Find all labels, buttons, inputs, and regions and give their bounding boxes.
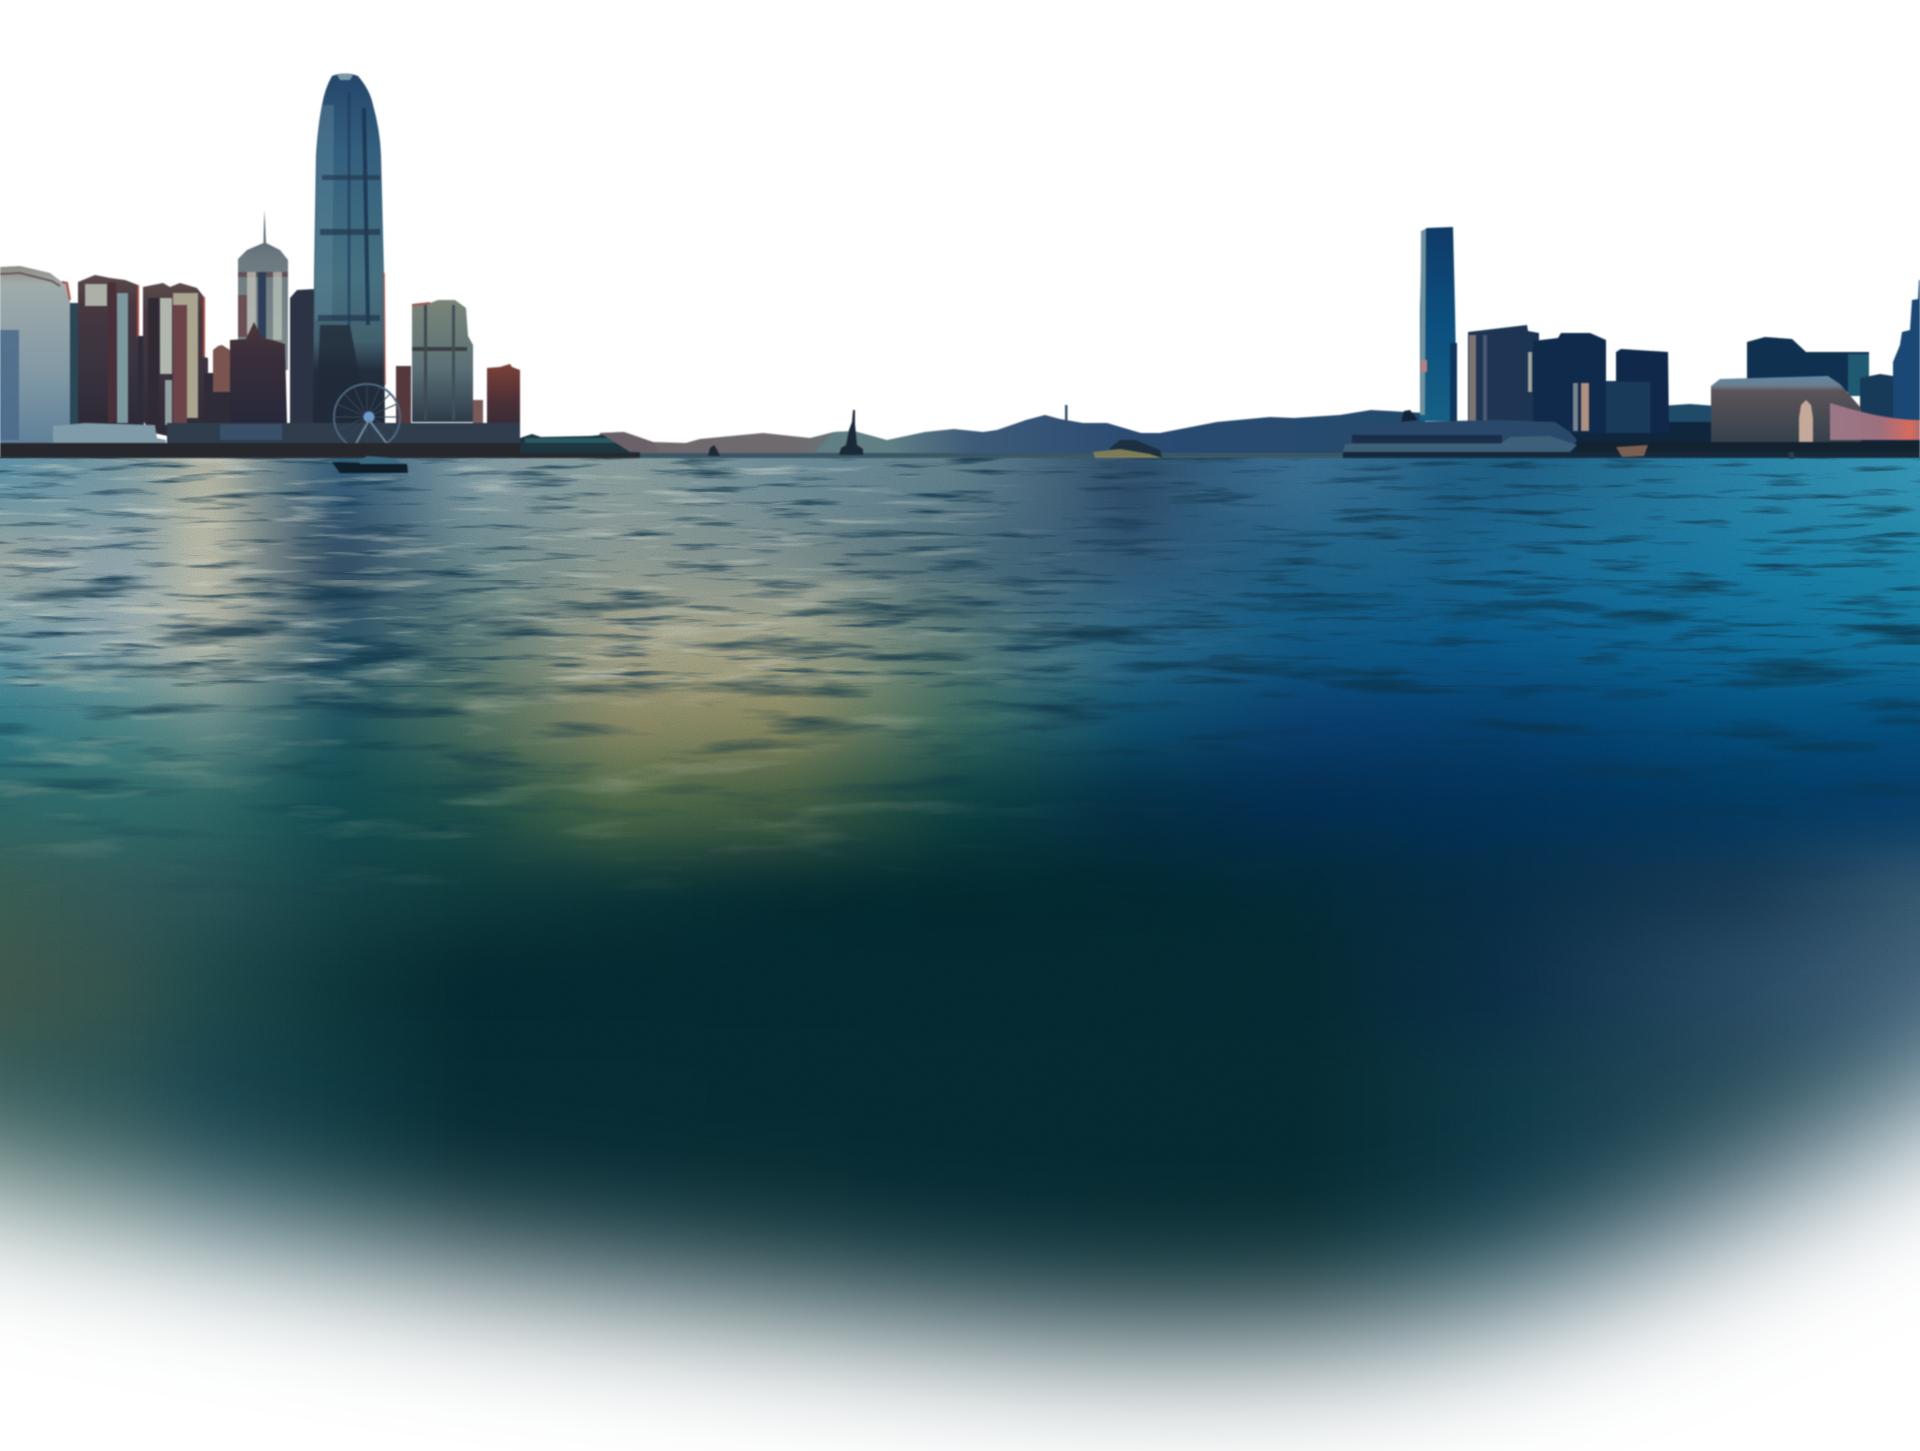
distant mountains	[590, 410, 1425, 458]
pier building	[520, 434, 640, 453]
dark hotel backdrop	[1747, 337, 1869, 392]
far right tower	[1893, 280, 1920, 425]
dark building under plaza	[230, 322, 287, 424]
chimney	[1065, 405, 1068, 427]
left tower: curved slab	[0, 266, 72, 443]
pier roof teal	[525, 438, 620, 443]
water colour field	[0, 380, 1920, 1451]
tan panel	[1573, 383, 1589, 431]
tug with mast	[839, 410, 863, 455]
ICC tower	[1420, 227, 1457, 421]
IFC tower	[313, 74, 385, 445]
marker buoy	[1789, 452, 1794, 459]
small red block	[396, 366, 411, 425]
red low block	[213, 345, 230, 392]
tower two stripes	[148, 293, 204, 425]
small pale block	[473, 400, 483, 438]
light hill	[815, 431, 900, 452]
right mid block	[1860, 374, 1893, 425]
ferry boat left	[332, 456, 408, 473]
far hill right	[1660, 404, 1716, 445]
harbour tower right	[412, 300, 473, 422]
harbour water	[0, 380, 1920, 1451]
waterfront strip right	[1577, 442, 1920, 456]
waterfront strip left	[0, 443, 640, 458]
distant shore strip	[640, 453, 1360, 458]
shore strip right top	[1343, 452, 1920, 458]
podium buildings	[167, 423, 520, 450]
light ripples	[0, 458, 1144, 884]
front low building	[53, 423, 166, 448]
ferry	[1093, 440, 1162, 458]
central plaza stripes	[238, 272, 288, 340]
cruise ship	[1343, 410, 1577, 452]
low dark block	[204, 373, 234, 428]
residential tower two	[143, 283, 208, 437]
blue tower	[1533, 333, 1606, 433]
cultural centre	[1830, 403, 1920, 440]
slot building	[70, 303, 79, 428]
dark ripples	[0, 457, 1920, 835]
hotel block	[1711, 376, 1861, 442]
skyline	[0, 74, 1920, 473]
podium blue section	[220, 424, 282, 440]
left tower details	[0, 273, 70, 440]
blue tower two	[1616, 349, 1669, 433]
small tan boat	[1616, 445, 1648, 457]
fine grain	[0, 458, 1920, 1079]
right-side backfill	[1460, 422, 1920, 456]
tan strip	[1469, 335, 1532, 425]
tower right crossbars	[412, 303, 467, 420]
gap block	[138, 336, 144, 426]
tall building pair	[1468, 325, 1539, 423]
observation wheel	[334, 384, 400, 450]
residential tower one	[78, 275, 138, 425]
brown tower	[487, 364, 520, 438]
stepped block	[1606, 381, 1654, 433]
small boat centre	[708, 445, 720, 456]
tower one stripes	[85, 282, 138, 423]
IFC details	[315, 74, 385, 445]
clock tower	[1799, 400, 1813, 444]
water reflections	[178, 478, 238, 578]
dark side tower	[290, 289, 316, 440]
ICC highlight	[1420, 229, 1457, 421]
teal block	[1848, 354, 1869, 396]
central plaza tower	[238, 210, 288, 370]
distant hill by pier	[600, 432, 660, 452]
